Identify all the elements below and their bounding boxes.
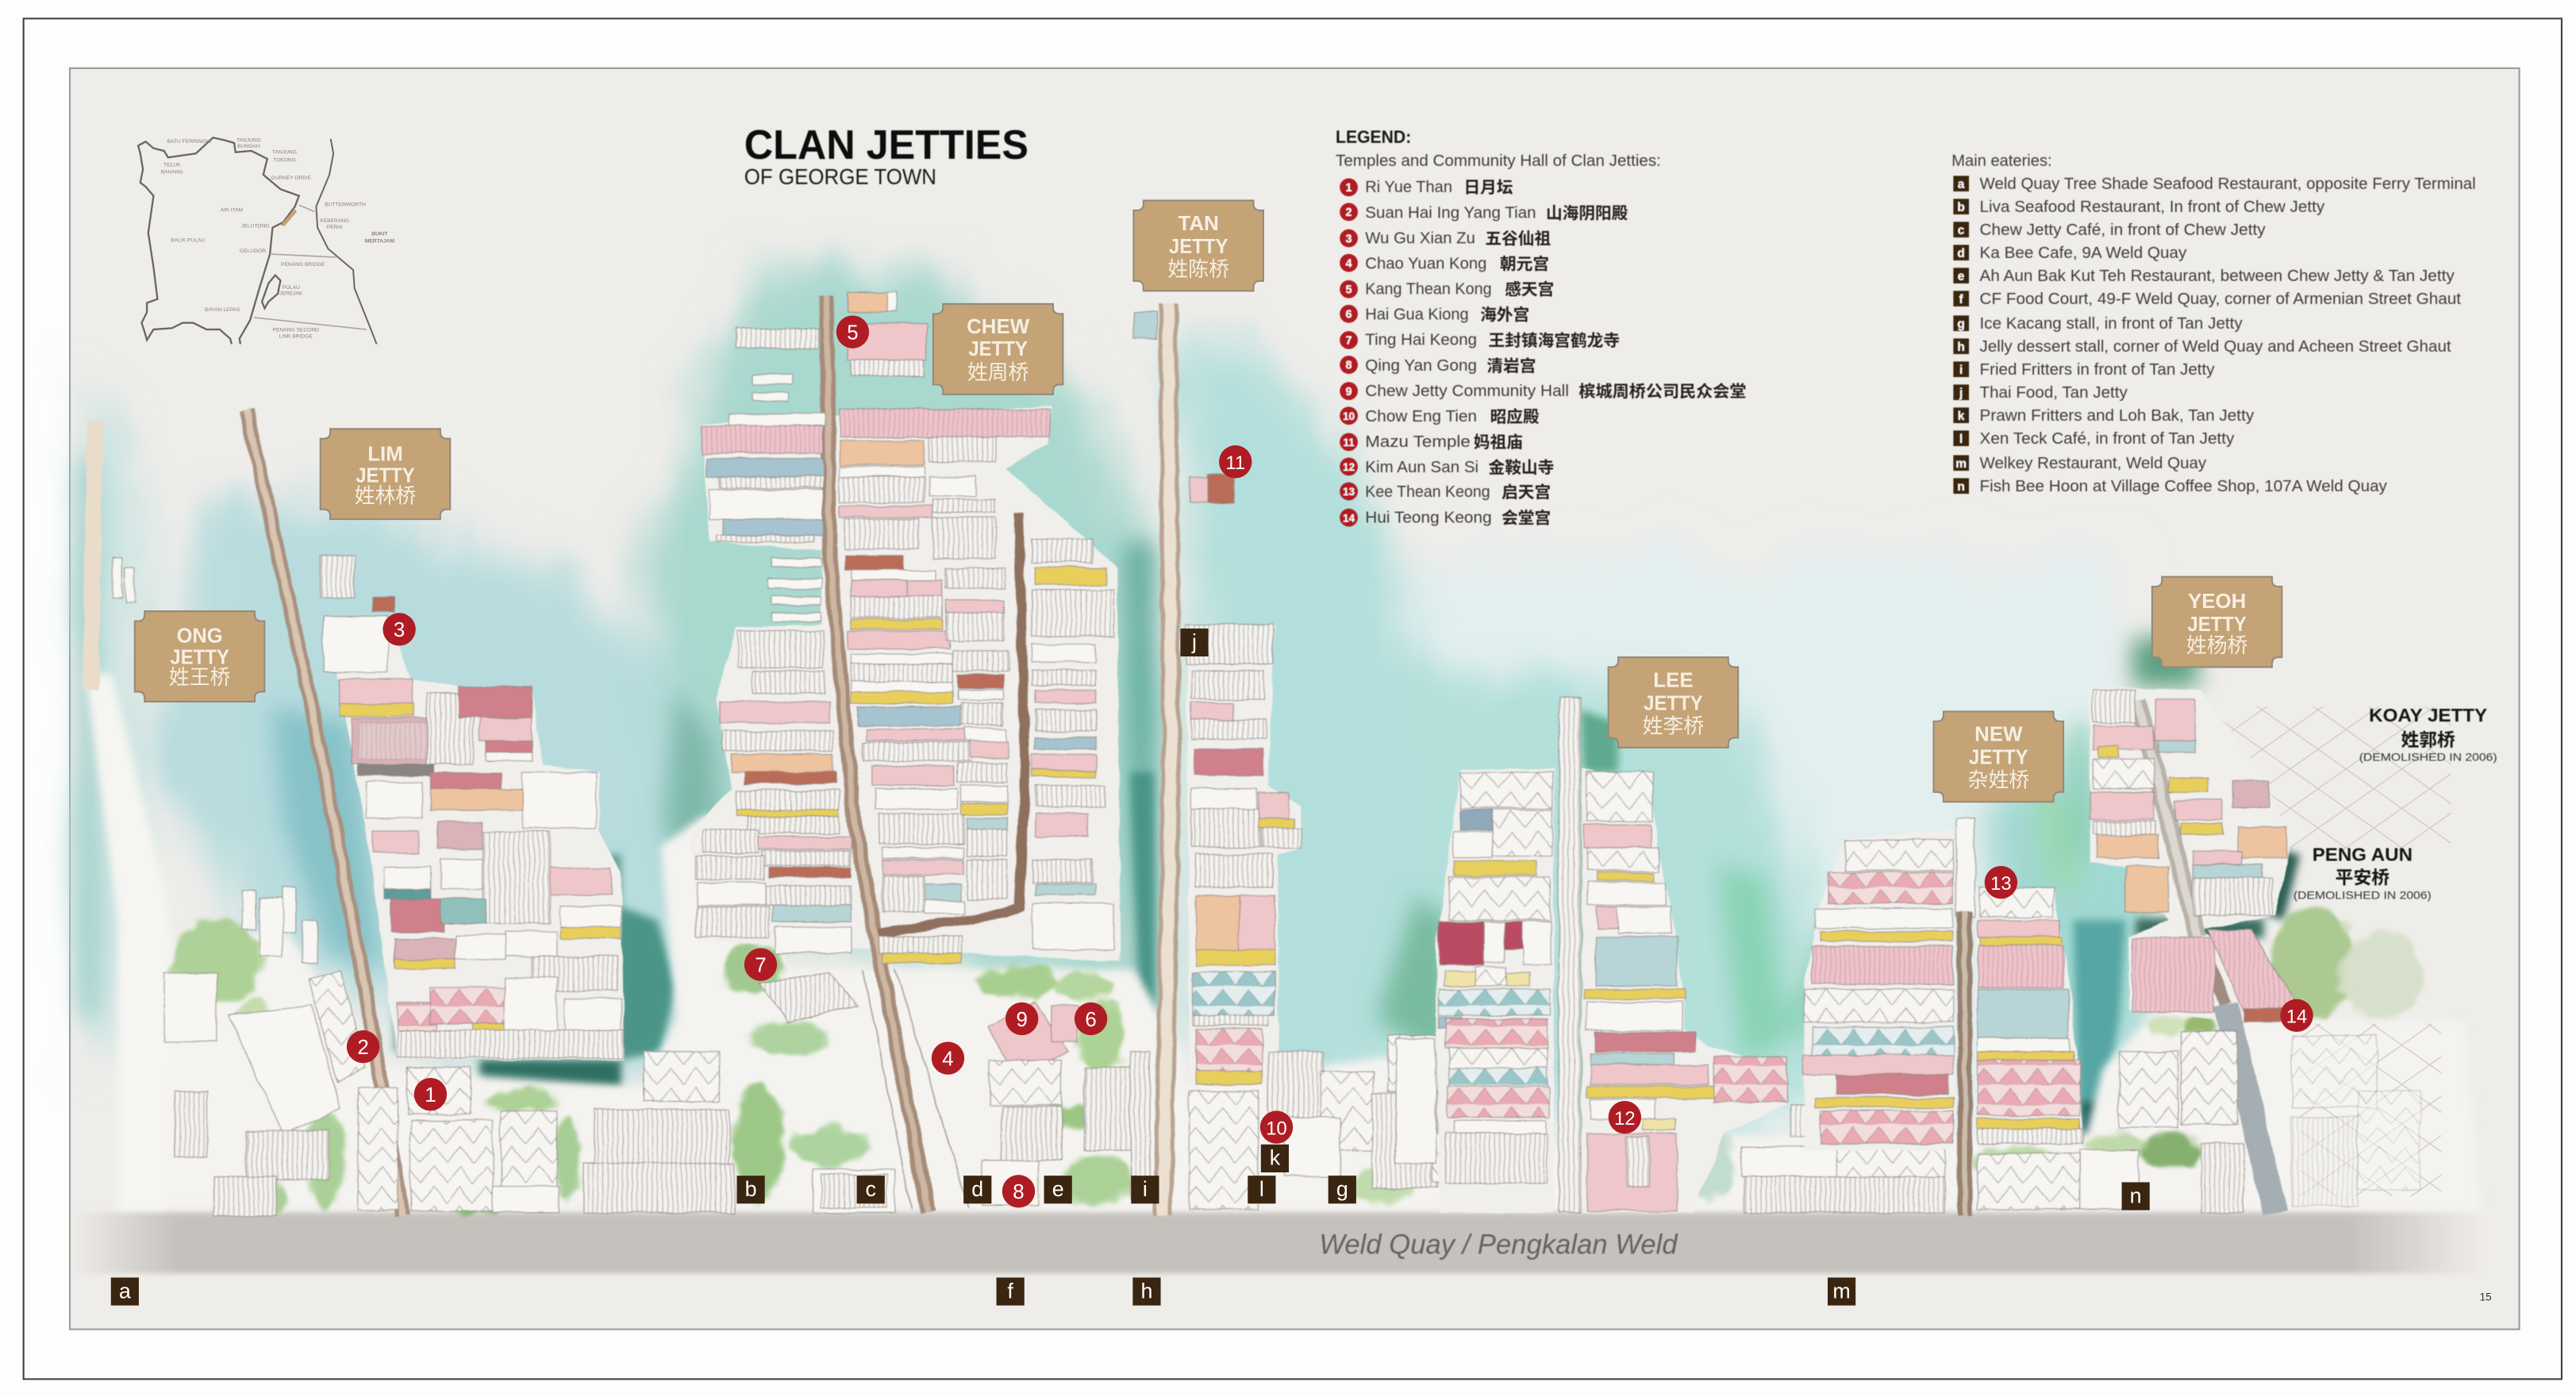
jetty label: Lim: JETTY <box>356 465 415 487</box>
legend: temples and community hall: 山海阴阳殿 <box>1546 204 1628 222</box>
legend: temples and community hall: 清岩宫 <box>1486 356 1536 375</box>
legend: temples and community hall: Chew Jetty Community Hall <box>1365 382 1569 400</box>
legend: temples and community hall <box>1336 127 1747 527</box>
legend: main eateries: l <box>1959 433 1963 446</box>
label: Peng Aun demolished <box>2293 845 2432 901</box>
temple markers 1 to 14: 10 <box>1266 1118 1287 1139</box>
temple markers 1 to 14: 7 <box>755 954 767 976</box>
jetty label: Ong: 姓王桥 <box>169 666 230 689</box>
temple markers 1 to 14: 1 <box>425 1084 436 1106</box>
eatery markers a to n: l <box>1259 1177 1264 1201</box>
legend: main eateries: h <box>1957 341 1965 354</box>
legend: temples and community hall: 6 <box>1346 309 1352 321</box>
jetty label: Lee <box>1609 657 1738 748</box>
eatery markers a to n: i <box>1143 1177 1148 1201</box>
legend: main eateries: n <box>1957 480 1965 494</box>
inset locator map of Penang: TOKONG <box>273 157 296 163</box>
illustration: shore buildings between Lee and New <box>1741 1104 1945 1213</box>
inset locator map of Penang: JELUTONG <box>241 224 269 229</box>
legend: temples and community hall: Chao Yuan Kong <box>1365 254 1486 272</box>
legend: temples and community hall: 5 <box>1346 284 1352 297</box>
legend: main eateries: Weld Quay Tree Shade Seafood Restaurant, opposite Ferry Terminal <box>1980 175 2476 193</box>
inset locator map of Penang: JEREJAK <box>279 291 303 297</box>
inset locator map of Penang <box>138 137 394 368</box>
legend: temples and community hall: 10 <box>1343 410 1355 422</box>
temple markers 1 to 14 <box>347 315 2313 1208</box>
inset locator map of Penang: BUKIT <box>371 232 388 237</box>
legend: main eateries: Prawn Fritters and Loh Bak, Tan Jetty <box>1980 406 2255 425</box>
illustration: Chew jetty village <box>690 292 1121 1213</box>
legend: temples and community hall: 朝元宫 <box>1500 254 1549 273</box>
jetty label: Ong: JETTY <box>170 646 229 668</box>
temple markers 1 to 14: 13 <box>1990 873 2012 895</box>
title <box>744 121 1028 189</box>
label: Koay Jetty demolished: (DEMOLISHED IN 2006) <box>2359 750 2497 763</box>
legend: main eateries: Ah Aun Bak Kut Teh Restaurant, between Chew Jetty & Tan Jetty <box>1980 267 2455 285</box>
temple markers 1 to 14: 5 <box>847 321 859 344</box>
legend: main eateries: g <box>1957 318 1965 331</box>
page number: 15 <box>2480 1291 2492 1303</box>
jetty label: Chew: CHEW <box>967 316 1030 338</box>
legend: temples and community hall: 2 <box>1346 206 1352 219</box>
inset locator map of Penang: LINK BRIDGE <box>279 333 313 339</box>
illustration: shore buildings between Tan and Lee <box>1190 1035 1472 1210</box>
legend: temples and community hall: 14 <box>1343 512 1355 524</box>
legend: temples and community hall: Kee Thean Keong <box>1365 483 1490 501</box>
illustration: shore land <box>86 674 2481 1213</box>
legend: main eateries: Liva Seafood Restaurant, In front of Chew Jetty <box>1980 198 2325 216</box>
illustration: Ong and Lim jetty village <box>90 411 625 1216</box>
inset locator map of Penang: BAHANG <box>161 169 183 175</box>
legend: main eateries: j <box>1959 387 1963 400</box>
legend: temples and community hall: 昭应殿 <box>1490 407 1540 426</box>
legend: temples and community hall: Mazu Temple <box>1365 433 1471 451</box>
inset locator map of Penang: KEBERANG <box>320 218 349 224</box>
jetty label: Tan <box>1133 201 1263 291</box>
legend: main eateries: c <box>1958 224 1965 237</box>
legend: main eateries: i <box>1959 364 1963 377</box>
legend: temples and community hall: 金鞍山寺 <box>1489 458 1554 477</box>
inset locator map of Penang: GURNEY DRIVE <box>271 175 312 181</box>
illustration: Lee jetty village <box>1397 697 1787 1213</box>
eatery markers a to n: c <box>865 1177 876 1201</box>
legend: temples and community hall: Temples and Community Hall of Clan Jetties: <box>1336 152 1661 170</box>
jetty label: Lim <box>321 429 450 519</box>
legend: temples and community hall: 4 <box>1346 257 1352 270</box>
temple markers 1 to 14: 9 <box>1016 1009 1028 1031</box>
jetty label: Ong: ONG <box>177 625 223 647</box>
illustration: Tan jetty village <box>1133 304 1301 1216</box>
legend: main eateries: d <box>1957 247 1965 260</box>
legend: main eateries: Ice Kacang stall, in front of Tan Jetty <box>1980 314 2243 333</box>
legend: temples and community hall: Hui Teong Keong <box>1365 508 1492 526</box>
eatery markers a to n: n <box>2130 1183 2142 1207</box>
illustration: New jetty village <box>1804 818 2083 1216</box>
inset locator map of Penang: TANJUNG <box>272 149 297 155</box>
legend: main eateries: b <box>1957 201 1965 214</box>
label: Peng Aun demolished: 平安桥 <box>2336 868 2390 888</box>
legend: temples and community hall: 海外宫 <box>1480 306 1529 325</box>
temple markers 1 to 14: 12 <box>1614 1108 1636 1130</box>
legend: main eateries: Xen Teck Café, in front of Tan Jetty <box>1980 429 2235 448</box>
inset locator map of Penang: TELUK <box>163 162 181 167</box>
eatery markers a to n: e <box>1052 1177 1064 1201</box>
legend: temples and community hall: Qing Yan Gong <box>1365 356 1477 375</box>
legend: temples and community hall: 12 <box>1343 461 1355 473</box>
temple markers 1 to 14: 14 <box>2286 1006 2307 1028</box>
jetty label: Yeoh: YEOH <box>2188 591 2246 613</box>
legend: temples and community hall: 启天宫 <box>1501 483 1551 502</box>
legend: main eateries: Chew Jetty Café, in front of Chew Jetty <box>1980 221 2266 239</box>
legend: main eateries: f <box>1959 293 1964 306</box>
legend: temples and community hall: 8 <box>1346 360 1352 372</box>
legend: temples and community hall: 9 <box>1346 386 1352 398</box>
legend: temples and community hall: Wu Gu Xian Zu <box>1365 229 1475 247</box>
legend: temples and community hall: 会堂宫 <box>1501 508 1551 527</box>
eatery markers a to n <box>111 629 2150 1306</box>
legend: main eateries: Fried Fritters in front of Tan Jetty <box>1980 360 2215 379</box>
jetty label: Yeoh: JETTY <box>2187 614 2247 636</box>
road: Weld Quay: Weld Quay / Pengkalan Weld <box>1319 1229 1678 1260</box>
legend: temples and community hall: 日月坛 <box>1464 179 1513 197</box>
eatery markers a to n: m <box>1832 1279 1851 1303</box>
legend: temples and community hall: Suan Hai Ing Yang Tian <box>1365 203 1536 221</box>
legend: main eateries: e <box>1958 270 1965 283</box>
eatery markers a to n: b <box>745 1177 757 1201</box>
eatery markers a to n: k <box>1270 1146 1281 1170</box>
jetty label: Lim: LIM <box>367 444 403 466</box>
legend: main eateries: Jelly dessert stall, corner of Weld Quay and Acheen Street Ghaut <box>1980 337 2451 356</box>
legend: main eateries: Ka Bee Cafe, 9A Weld Quay <box>1980 244 2187 262</box>
inset locator map of Penang: AIR ITAM <box>221 208 243 214</box>
legend: temples and community hall: Chow Eng Tien <box>1365 407 1477 425</box>
legend: main eateries: Main eateries: <box>1951 152 2052 170</box>
eatery markers a to n: a <box>119 1279 131 1303</box>
jetty label: New <box>1934 711 2063 802</box>
inset locator map of Penang: BUTTERWORTH <box>325 202 366 207</box>
illustration: Yeoh jetty village <box>2090 687 2295 1213</box>
inset locator map of Penang: PERAI <box>327 225 343 230</box>
label: Koay Jetty demolished <box>2359 705 2497 763</box>
legend: temples and community hall: 3 <box>1346 233 1352 245</box>
temple markers 1 to 14: 4 <box>942 1048 954 1070</box>
inset locator map of Penang: BUNGAH <box>237 144 260 149</box>
legend: temples and community hall: 感天宫 <box>1505 280 1554 299</box>
inset locator map of Penang: BATU FERRINGHI <box>167 139 211 144</box>
jetty label: New: 杂姓桥 <box>1968 769 2029 792</box>
inset locator map of Penang: BAYAN LEPAS <box>205 307 240 313</box>
road: Weld Quay <box>69 1213 2520 1273</box>
label: Peng Aun demolished: PENG AUN <box>2313 845 2413 865</box>
illustration: trees <box>172 907 2423 1214</box>
jetty label: Yeoh <box>2152 577 2282 667</box>
jetty label: Lee: LEE <box>1653 669 1694 691</box>
jetty label: Chew: 姓周桥 <box>967 361 1029 384</box>
illustration: watercolour water <box>79 263 2300 1150</box>
eatery markers a to n: g <box>1336 1177 1348 1201</box>
title: OF GEORGE TOWN <box>744 164 936 189</box>
legend: temples and community hall: 妈祖庙 <box>1474 433 1523 452</box>
title: CLAN JETTIES <box>744 121 1028 167</box>
illustration: faint demolished jetties <box>2217 706 2451 1196</box>
label: Koay Jetty demolished: KOAY JETTY <box>2369 705 2487 725</box>
legend: temples and community hall: Kang Thean Kong <box>1365 280 1492 298</box>
temple markers 1 to 14: 11 <box>1225 452 1245 474</box>
legend: temples and community hall: 11 <box>1343 437 1355 448</box>
eatery markers a to n: h <box>1140 1279 1152 1303</box>
jetty label: Tan: TAN <box>1178 213 1219 235</box>
inset locator map of Penang: TANJUNG <box>236 137 261 143</box>
jetty label: Tan: JETTY <box>1169 236 1228 258</box>
jetty label: Chew <box>933 304 1063 394</box>
temple markers 1 to 14: 2 <box>357 1037 369 1059</box>
legend: temples and community hall: LEGEND: <box>1336 127 1411 147</box>
jetty label: New: NEW <box>1974 724 2023 746</box>
eatery markers a to n: j <box>1191 630 1197 654</box>
inset locator map of Penang: MERTAJAM <box>365 239 394 244</box>
legend: temples and community hall: 王封镇海宫鹤龙寺 <box>1489 331 1620 350</box>
temple markers 1 to 14: 8 <box>1013 1181 1025 1203</box>
inset locator map of Penang: BALIK PULAU <box>171 238 205 244</box>
legend: main eateries: m <box>1955 457 1967 471</box>
illustration: central shore buildings <box>759 969 1150 1213</box>
legend: temples and community hall: Ri Yue Than <box>1365 178 1452 196</box>
inset locator map of Penang: PENANG SECOND <box>273 327 319 333</box>
temple markers 1 to 14: 3 <box>394 619 405 641</box>
jetty label: Lee: 姓李桥 <box>1643 714 1704 737</box>
eatery markers a to n: f <box>1007 1279 1013 1303</box>
legend: main eateries: CF Food Court, 49-F Weld Quay, corner of Armenian Street Ghaut <box>1980 290 2461 308</box>
legend: temples and community hall: 1 <box>1346 182 1352 194</box>
illustration: left shore buildings <box>164 969 734 1216</box>
jetty label: New: JETTY <box>1969 747 2028 769</box>
temple markers 1 to 14: 6 <box>1085 1009 1097 1031</box>
legend: main eateries: k <box>1958 410 1965 423</box>
jetty label: Yeoh: 姓杨桥 <box>2186 634 2248 657</box>
legend: main eateries: Thai Food, Tan Jetty <box>1980 383 2128 402</box>
jetty label: Tan: 姓陈桥 <box>1167 258 1229 281</box>
legend: temples and community hall: 7 <box>1346 335 1352 348</box>
inset locator map of Penang: PULAU <box>283 285 300 291</box>
legend: main eateries: Welkey Restaurant, Weld Quay <box>1980 454 2207 472</box>
legend: temples and community hall: Hai Gua Kiong <box>1365 306 1469 324</box>
eatery markers a to n: d <box>971 1177 983 1201</box>
label: Koay Jetty demolished: 姓郭桥 <box>2401 729 2455 750</box>
legend: temples and community hall: Kim Aun San Si <box>1365 458 1478 476</box>
legend: main eateries <box>1951 152 2476 495</box>
jetty label: Lee: JETTY <box>1644 692 1703 714</box>
legend: temples and community hall: 五谷仙祖 <box>1485 229 1551 248</box>
illustration: right shore buildings <box>1978 1032 2420 1213</box>
legend: temples and community hall: Ting Hai Keong <box>1365 331 1477 349</box>
legend: temples and community hall: 槟城周桥公司民众会堂 <box>1578 383 1747 401</box>
jetty label: Chew: JETTY <box>968 338 1028 360</box>
label: Peng Aun demolished: (DEMOLISHED IN 2006) <box>2293 888 2432 901</box>
jetty label: Lim: 姓林桥 <box>355 484 416 507</box>
inset locator map of Penang: PENANG BRIDGE <box>281 262 325 267</box>
legend: temples and community hall: 13 <box>1343 486 1355 498</box>
legend: main eateries: a <box>1958 178 1965 191</box>
inset locator map of Penang: GELUGOR <box>240 248 266 254</box>
legend: main eateries: Fish Bee Hoon at Village Coffee Shop, 107A Weld Quay <box>1980 477 2388 495</box>
jetty label: Ong <box>135 611 264 702</box>
